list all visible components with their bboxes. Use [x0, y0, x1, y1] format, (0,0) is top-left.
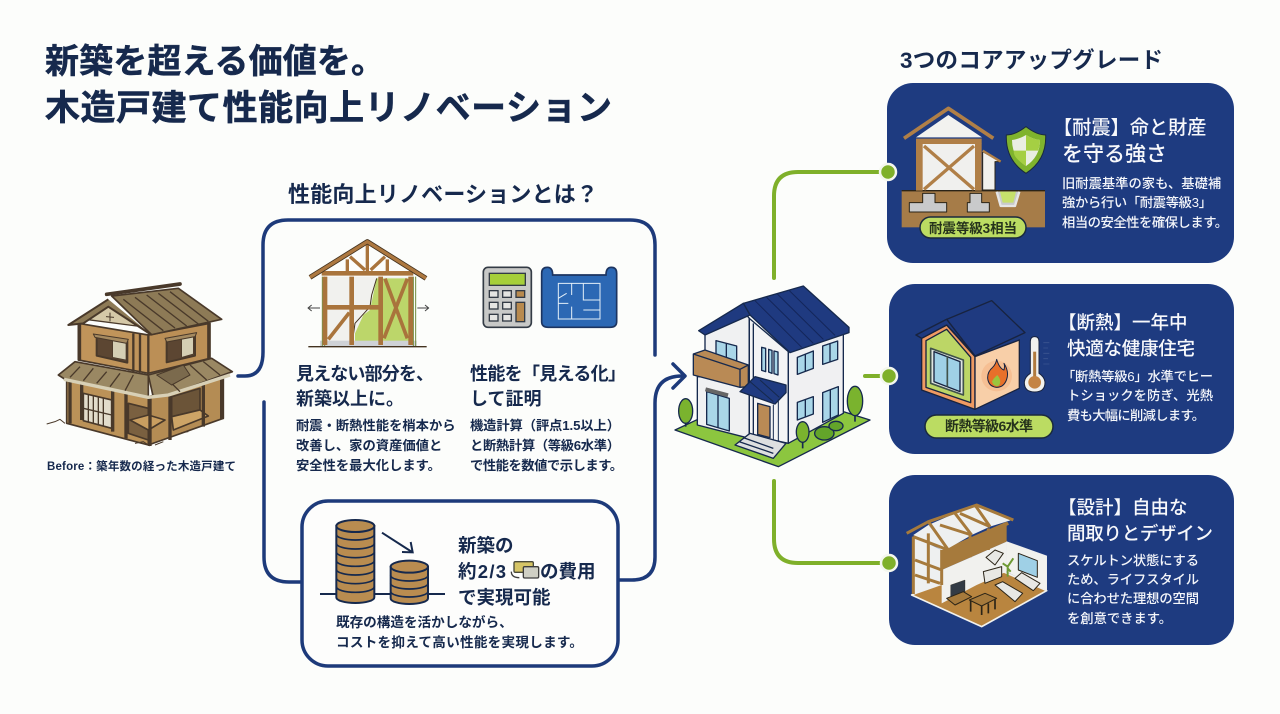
card text — [1053, 117, 1228, 230]
heading: what is performance renovation: 性能向上リノベーションとは？ — [288, 182, 598, 207]
title — [45, 43, 612, 128]
card text: 費も大幅に削減します。 — [1067, 407, 1205, 423]
card text: 強から行い「耐震等級3」 — [1062, 194, 1212, 210]
icon: shield — [1006, 127, 1046, 173]
cost headline: で実現可能 — [458, 587, 551, 608]
cost headline: 約2/3 — [458, 561, 506, 582]
text: visualised performance: 性能を「見える化」 — [470, 364, 626, 384]
card text: に合わせた理想の空間 — [1067, 591, 1199, 606]
connector dot — [880, 164, 896, 180]
badge: insulation grade 6 — [925, 415, 1053, 438]
connector dot — [881, 368, 897, 384]
flow frame connecting before house to new house — [238, 220, 685, 582]
text: invisible parts — [296, 364, 456, 473]
card text: ため、ライフスタイル — [1067, 572, 1199, 587]
text: invisible parts: 新築以上に。 — [296, 388, 404, 409]
cost description: コストを抑えて高い性能を実現します。 — [336, 634, 583, 650]
connector dot — [881, 555, 897, 571]
card text: 旧耐震基準の家も、基礎補 — [1062, 175, 1221, 191]
badge: seismic grade 3: 耐震等級3相当 — [929, 220, 1017, 236]
text: visualised performance: で性能を数値で示します。 — [470, 457, 623, 473]
card text: 【断熱】一年中 — [1058, 312, 1188, 333]
text: visualised performance: して証明 — [470, 389, 541, 409]
panel: design card — [881, 475, 1234, 645]
card text: 【耐震】命と財産 — [1053, 117, 1206, 139]
card text: 間取りとデザイン — [1067, 523, 1213, 544]
card text — [1058, 497, 1213, 626]
card text: 【設計】自由な — [1058, 497, 1188, 518]
card text: を創意できます。 — [1067, 611, 1172, 626]
cost headline: の費用 — [540, 561, 596, 582]
card text: スケルトン状態にする — [1067, 552, 1199, 568]
text: invisible parts: 安全性を最大化します。 — [296, 457, 441, 473]
icon: banknotes — [511, 562, 539, 578]
card text: 快適な健康住宅 — [1067, 338, 1195, 359]
icon: renovated house — [675, 286, 870, 467]
text: invisible parts: 見えない部分を、 — [296, 364, 434, 384]
panel: cost box — [302, 501, 618, 666]
icon: insulated house with flame — [916, 301, 1025, 409]
cost description: 既存の構造を活かしながら、 — [336, 614, 513, 630]
connector: to seismic card — [774, 172, 885, 278]
panel: insulation card — [881, 284, 1234, 454]
cost headline: 新築の — [458, 535, 514, 556]
connector: to insulation card — [865, 374, 888, 378]
card text — [1058, 312, 1213, 423]
connector: to design card — [774, 481, 885, 563]
icon: cutaway open-plan interior — [907, 505, 1047, 627]
heading: 3 core upgrades: 3つのコアアップグレード — [900, 47, 1163, 73]
badge: seismic grade 3 — [920, 217, 1026, 238]
text: visualised performance: と断熱計算（等級6水準） — [470, 437, 620, 453]
caption: before: Before：築年数の経った木造戸建て — [47, 459, 236, 473]
icon: before old wooden house — [47, 284, 232, 446]
text: invisible parts: 改善し、家の資産価値と — [296, 437, 442, 453]
text: visualised performance — [470, 364, 626, 473]
icon: timber frame structure — [308, 242, 429, 347]
icon: blueprint — [542, 267, 617, 327]
cost headline — [458, 535, 596, 608]
icon: calculator — [483, 267, 531, 327]
card text: トショックを防ぎ、光熱 — [1067, 388, 1213, 403]
panel: seismic card — [880, 83, 1234, 263]
card text: 相当の安全性を確保します。 — [1062, 215, 1228, 230]
icon: coin stacks with down arrow — [320, 520, 445, 604]
cost description — [336, 614, 583, 650]
title: 木造戸建て性能向上リノベーション — [45, 89, 612, 128]
badge: insulation grade 6: 断熱等級6水準 — [945, 418, 1033, 434]
title: 新築を超える価値を。 — [45, 43, 385, 81]
text: invisible parts: 耐震・断熱性能を梢本から — [296, 417, 456, 433]
icon: braced house on foundation — [902, 108, 1045, 227]
icon: thermometer — [1024, 337, 1049, 392]
card text: 「断熱等級6」水準でヒー — [1062, 368, 1213, 384]
card text: を守る強さ — [1062, 143, 1167, 166]
text: visualised performance: 機造計算（評点1.5以上） — [470, 417, 620, 433]
